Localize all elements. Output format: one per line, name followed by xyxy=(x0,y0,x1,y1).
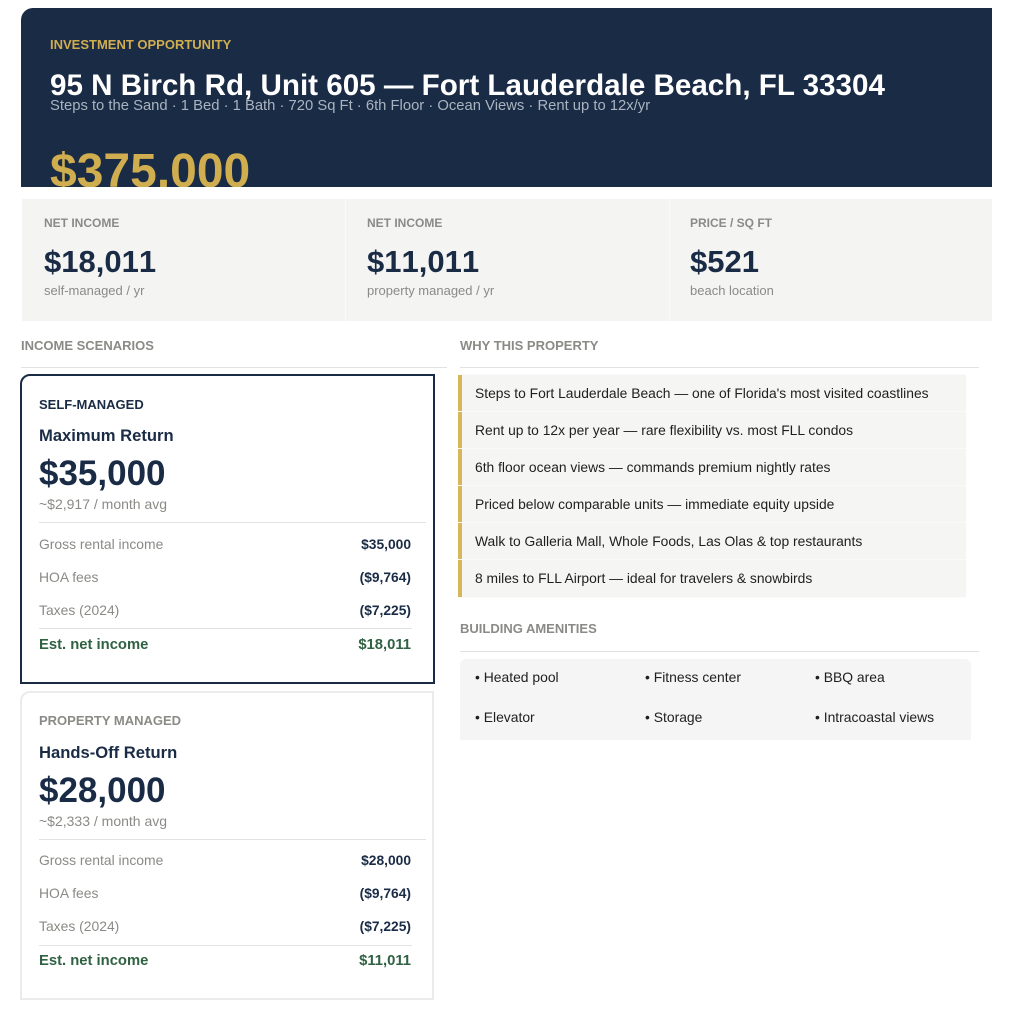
stat: net income property managed: property managed / yr xyxy=(367,283,494,298)
row: taxes xyxy=(39,602,411,618)
highlight 1 xyxy=(458,375,966,411)
row: taxes: Taxes (2024) xyxy=(39,602,119,618)
row: HOA fees: ($9,764) xyxy=(360,570,411,585)
card: self-managed xyxy=(20,374,435,684)
row: HOA fees: HOA fees xyxy=(39,885,98,901)
heading: building amenities: BUILDING AMENITIES xyxy=(460,621,597,636)
row: net income xyxy=(39,953,411,969)
stat: net income property managed: $11,011 xyxy=(367,244,479,279)
stat: price per sq ft: PRICE / SQ FT xyxy=(690,216,772,230)
row: taxes xyxy=(39,918,411,934)
row: taxes: Taxes (2024) xyxy=(39,918,119,934)
row: gross rental income xyxy=(39,852,411,868)
row: gross rental income: $35,000 xyxy=(361,537,411,552)
title: 95 N Birch Rd, Unit 605 — Fort Lauderdale Beach, FL 33304 xyxy=(50,69,885,102)
amenity: BBQ area: • BBQ area xyxy=(815,669,885,685)
stat: price per sq ft xyxy=(690,216,774,298)
stat: price per sq ft: beach location xyxy=(690,283,774,298)
monthly average: ~$2,333 / month avg xyxy=(39,813,167,829)
stat: price per sq ft: $521 xyxy=(690,244,759,279)
amenity: elevator: • Elevator xyxy=(475,709,535,725)
highlight 6 xyxy=(458,560,966,597)
row: HOA fees xyxy=(39,885,411,901)
row: HOA fees xyxy=(39,569,411,585)
header banner xyxy=(21,8,992,187)
row: taxes: ($7,225) xyxy=(360,603,411,618)
stat: net income self-managed: $18,011 xyxy=(44,244,156,279)
row: net income: Est. net income xyxy=(39,637,148,653)
card: property managed xyxy=(20,691,434,1000)
highlight 3 xyxy=(458,449,966,485)
card title: Hands-Off Return xyxy=(39,743,177,762)
amenity: fitness center: • Fitness center xyxy=(645,669,741,685)
row: net income: $18,011 xyxy=(358,637,411,653)
amenity: heated pool: • Heated pool xyxy=(475,669,559,685)
stat: net income self-managed: NET INCOME xyxy=(44,216,119,230)
highlight 3: 6th floor ocean views — commands premium nightly rates xyxy=(475,459,830,475)
highlight 2 xyxy=(458,412,966,448)
card amount: $35,000 xyxy=(39,454,166,493)
stats band xyxy=(22,199,992,321)
card title: Maximum Return xyxy=(39,426,174,445)
row: gross rental income: Gross rental income xyxy=(39,852,163,868)
eyebrow label: INVESTMENT OPPORTUNITY xyxy=(50,37,231,52)
highlight 5: Walk to Galleria Mall, Whole Foods, Las Olas & top restaurants xyxy=(475,533,862,549)
card amount: $28,000 xyxy=(39,771,166,810)
highlight 5 xyxy=(458,523,966,559)
row: HOA fees: HOA fees xyxy=(39,569,98,585)
row: taxes: ($7,225) xyxy=(360,919,411,934)
list: property highlights xyxy=(458,374,966,598)
heading: why this property: WHY THIS PROPERTY xyxy=(460,338,598,353)
stat: net income self-managed xyxy=(22,199,346,321)
highlight 1: Steps to Fort Lauderdale Beach — one of Florida's most visited coastlines xyxy=(475,385,929,401)
row: net income: $11,011 xyxy=(359,953,411,969)
card tag: SELF-MANAGED xyxy=(39,397,144,412)
stat: net income property managed: NET INCOME xyxy=(367,216,442,230)
row: gross rental income: $28,000 xyxy=(361,853,411,868)
highlight 6: 8 miles to FLL Airport — ideal for travelers & snowbirds xyxy=(475,570,812,586)
card tag: PROPERTY MANAGED xyxy=(39,713,181,728)
heading: income scenarios: INCOME SCENARIOS xyxy=(21,338,154,353)
monthly average: ~$2,917 / month avg xyxy=(39,496,167,512)
row: gross rental income: Gross rental income xyxy=(39,536,163,552)
panel: amenities xyxy=(460,659,971,740)
amenity: intracoastal views: • Intracoastal views xyxy=(815,709,934,725)
row: gross rental income xyxy=(39,536,411,552)
stat: net income property managed xyxy=(346,199,670,321)
amenity: storage: • Storage xyxy=(645,709,702,725)
highlight 2: Rent up to 12x per year — rare flexibility vs. most FLL condos xyxy=(475,422,853,438)
row: HOA fees: ($9,764) xyxy=(360,886,411,901)
row: net income xyxy=(39,637,411,653)
highlight 4: Priced below comparable units — immediate equity upside xyxy=(475,496,834,512)
highlight 4 xyxy=(458,486,966,522)
subtitle: Steps to the Sand · 1 Bed · 1 Bath · 720 Sq Ft · 6th Floor · Ocean Views · Rent up to 12x/yr xyxy=(50,98,650,114)
stat: net income self-managed: self-managed / yr xyxy=(44,283,144,298)
row: net income: Est. net income xyxy=(39,953,148,969)
